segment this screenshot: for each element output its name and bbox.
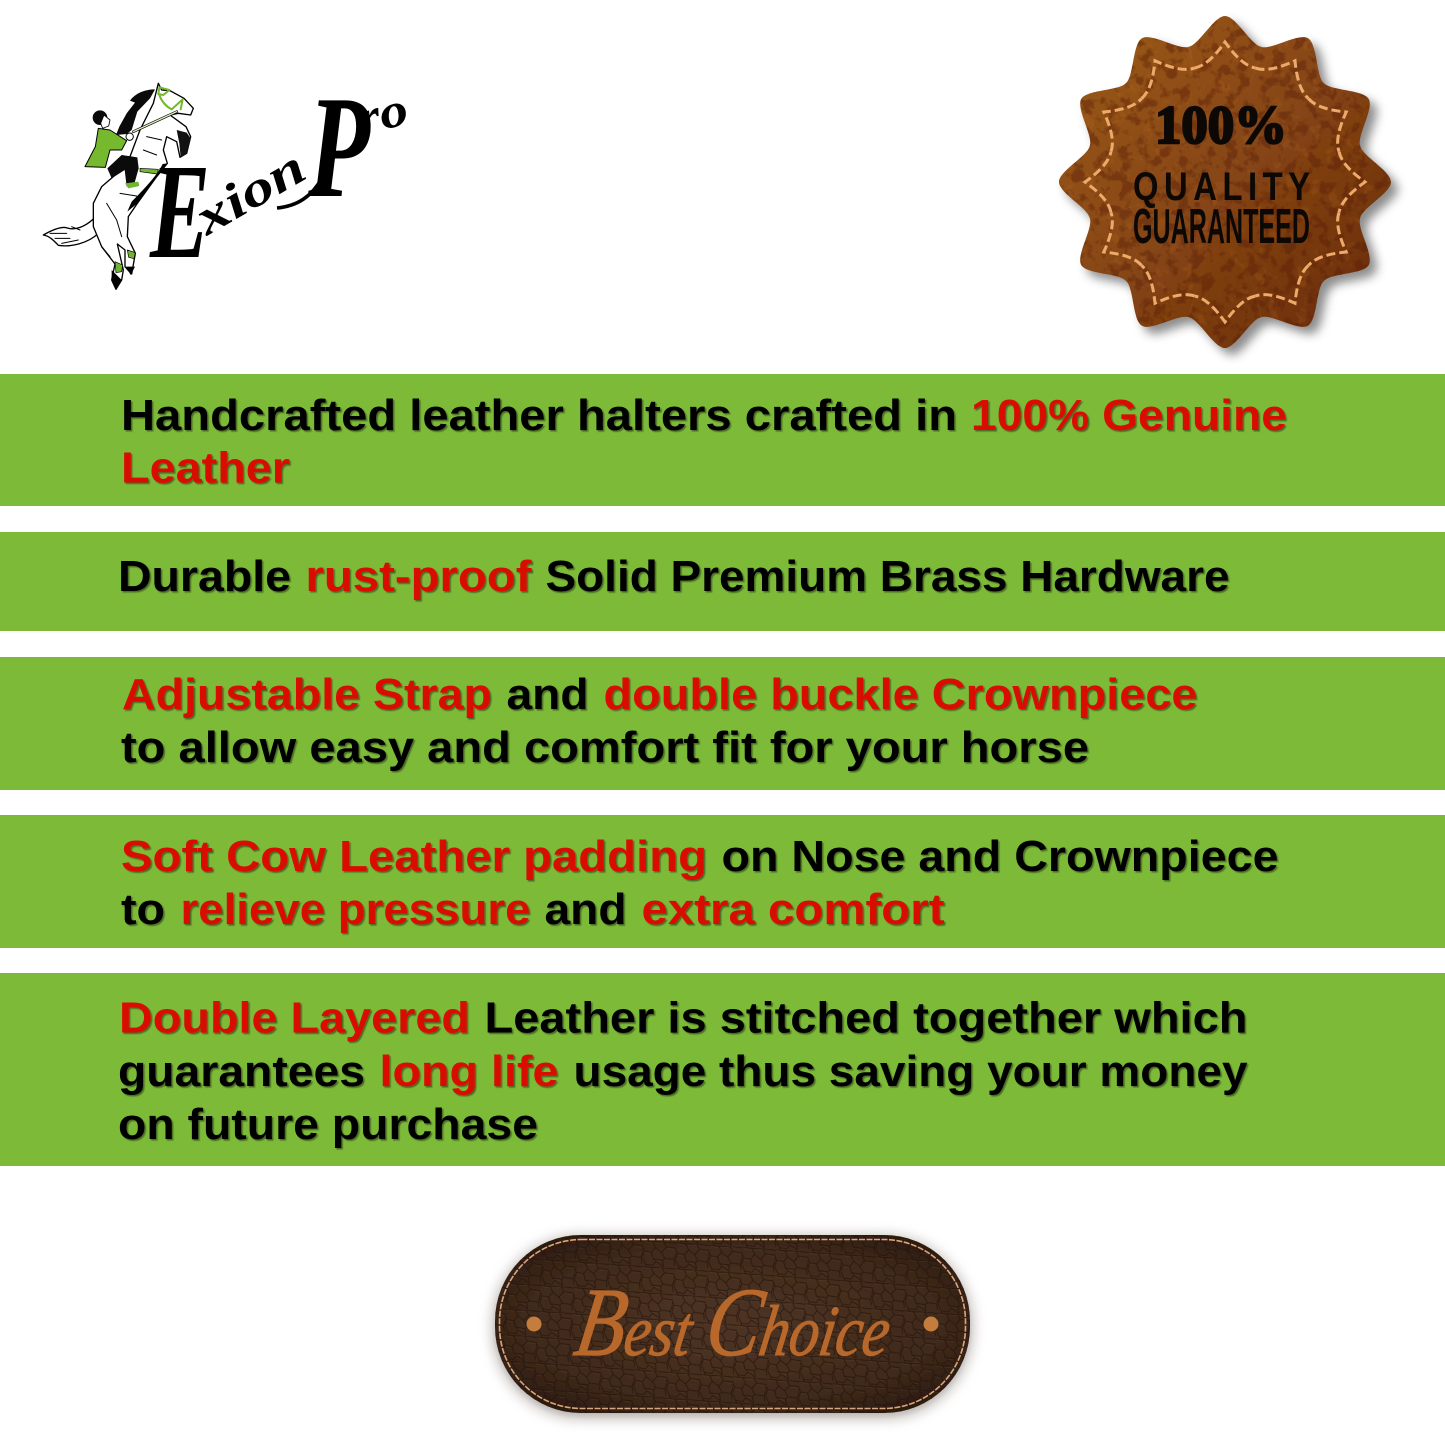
patch stitching — [500, 1240, 966, 1408]
panel: soft padding — [0, 815, 1445, 948]
text: soft padding: Soft Cow Leather padding — [121, 832, 707, 881]
text: double layered leather: Double Layered — [119, 994, 470, 1042]
text: double layered leather: guarantees — [118, 1047, 365, 1096]
patch base — [495, 1235, 970, 1413]
text: brass hardware: rust-proof — [306, 552, 532, 601]
text: soft padding: extra comfort — [642, 885, 945, 934]
text: brass hardware: Durable — [118, 552, 291, 601]
text: double layered leather: usage thus saving your money — [574, 1047, 1248, 1096]
badge text: QUALITY — [1133, 164, 1310, 209]
panel: brass hardware — [0, 532, 1445, 631]
text: adjustable strap: and — [506, 670, 588, 719]
text: genuine leather: 100% Genuine — [971, 391, 1287, 440]
badge shape — [1055, 12, 1395, 352]
text: brass hardware: Solid Premium Brass Hardware — [546, 552, 1230, 601]
logo: ExionPro horse and rider — [43, 66, 413, 289]
patch text: Best Choice — [569, 1269, 900, 1377]
label: best choice leather patch — [495, 1235, 970, 1413]
badge leather texture — [1055, 12, 1395, 352]
panel: adjustable strap — [0, 657, 1445, 790]
text: adjustable strap: to allow easy and comfort fit for your horse — [121, 723, 1089, 772]
panel: double layered leather — [0, 973, 1445, 1166]
text: double layered leather: Leather is stitched together which — [484, 994, 1248, 1042]
icon: rearing horse with rider — [43, 83, 193, 289]
text: soft padding: relieve pressure — [180, 885, 530, 934]
text: double layered leather — [118, 994, 1248, 1149]
patch pebble texture — [495, 1235, 970, 1413]
text: soft padding: to — [121, 885, 165, 934]
patch left dot — [526, 1316, 542, 1332]
text: soft padding — [121, 832, 1278, 934]
text: soft padding: and — [544, 885, 626, 934]
logo wordmark — [149, 66, 413, 287]
text: double layered leather: on future purchase — [118, 1100, 538, 1149]
text: genuine leather: Leather — [121, 444, 290, 492]
logo wordmark: xion — [183, 138, 315, 246]
text: genuine leather — [121, 391, 1287, 492]
badge text: 100% — [1155, 95, 1287, 155]
logo wordmark: E — [149, 137, 210, 287]
badge text — [1133, 95, 1310, 254]
text: adjustable strap — [121, 670, 1198, 772]
badge: 100% quality guaranteed — [1055, 12, 1395, 352]
logo wordmark: ro — [352, 82, 413, 146]
badge stitching — [1085, 42, 1365, 322]
text: double layered leather: long life — [380, 1047, 558, 1096]
panel: genuine leather — [0, 374, 1445, 506]
patch right dot — [924, 1316, 938, 1332]
text: brass hardware — [118, 552, 1230, 601]
text: genuine leather: Handcrafted leather halters crafted in — [121, 391, 957, 440]
text: adjustable strap: Adjustable Strap — [122, 670, 492, 719]
text: adjustable strap: double buckle Crownpiece — [604, 670, 1198, 719]
text: soft padding: on Nose and Crownpiece — [722, 832, 1278, 881]
logo wordmark: P — [307, 66, 371, 228]
